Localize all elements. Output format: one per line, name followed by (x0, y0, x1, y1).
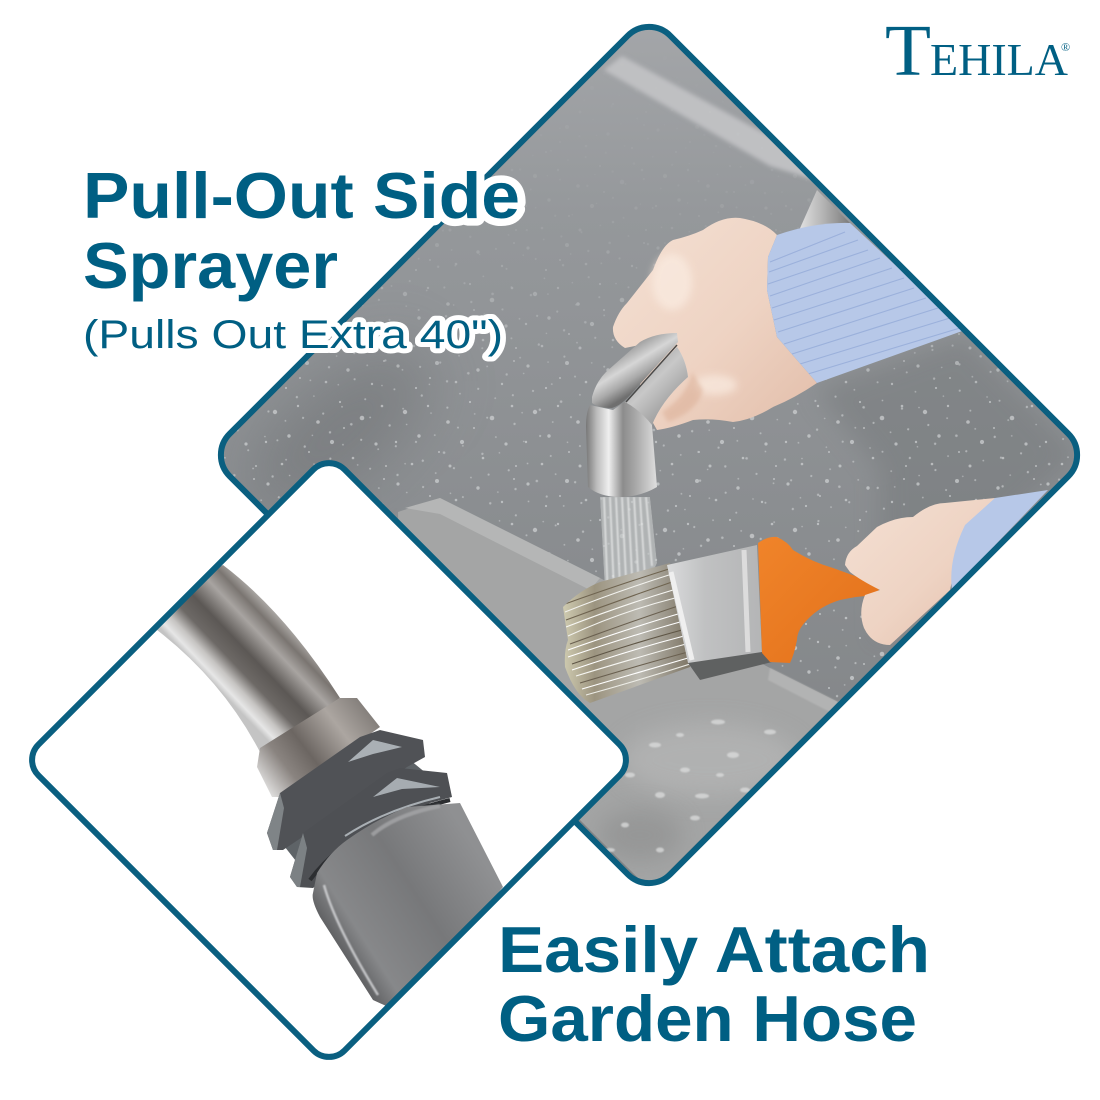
heading: easily attach garden hose: Garden Hose (498, 982, 917, 1055)
paint brush (563, 537, 880, 703)
heading: pull-out side sprayer: Pull-Out Side (83, 159, 520, 232)
curved stainless spout (150, 565, 340, 752)
threaded ring (286, 763, 423, 860)
second hand (845, 498, 995, 645)
hex nut lower (290, 768, 452, 888)
brush orange handle (758, 537, 880, 663)
brush bristles (563, 563, 690, 703)
water droplets on wall (224, 208, 1069, 702)
sink rim highlight (604, 56, 815, 180)
heading: pull-out side sprayer: Sprayer (83, 229, 338, 302)
water stream (600, 497, 657, 581)
sweater cuff (767, 223, 965, 383)
wall shadow right (830, 341, 1068, 522)
spout collar (257, 698, 380, 797)
brush metal ferrule (667, 545, 762, 680)
logo: Tehila: ® (1061, 40, 1070, 54)
wall shadow left (255, 350, 426, 498)
ferrule dark band (688, 652, 772, 680)
heading: pull-out side sprayer (83, 159, 520, 357)
logo: Tehila: T (885, 10, 931, 91)
logo: Tehila: EHILA (930, 34, 1068, 85)
hand holding sprayer (613, 218, 817, 430)
panel: small diamond hose connector (23, 454, 635, 1066)
heading: easily attach garden hose: Easily Attach (498, 913, 930, 986)
panel: large diamond sink photo (200, 14, 1100, 900)
sprayer head (592, 333, 678, 408)
second sweater cuff (951, 490, 1048, 590)
sprayer body (586, 345, 688, 497)
heading: pull-out side sprayer: (Pulls Out Extra 40") (83, 313, 503, 357)
gray hose grip (313, 803, 503, 1010)
sink basin floor (398, 498, 838, 890)
hex nut upper (267, 730, 425, 850)
heading: easily attach garden hose (498, 913, 930, 1055)
logo: Tehila (885, 10, 1070, 91)
metal hose (800, 190, 850, 228)
gasket ring (310, 797, 450, 880)
sink back wall (200, 20, 1100, 900)
